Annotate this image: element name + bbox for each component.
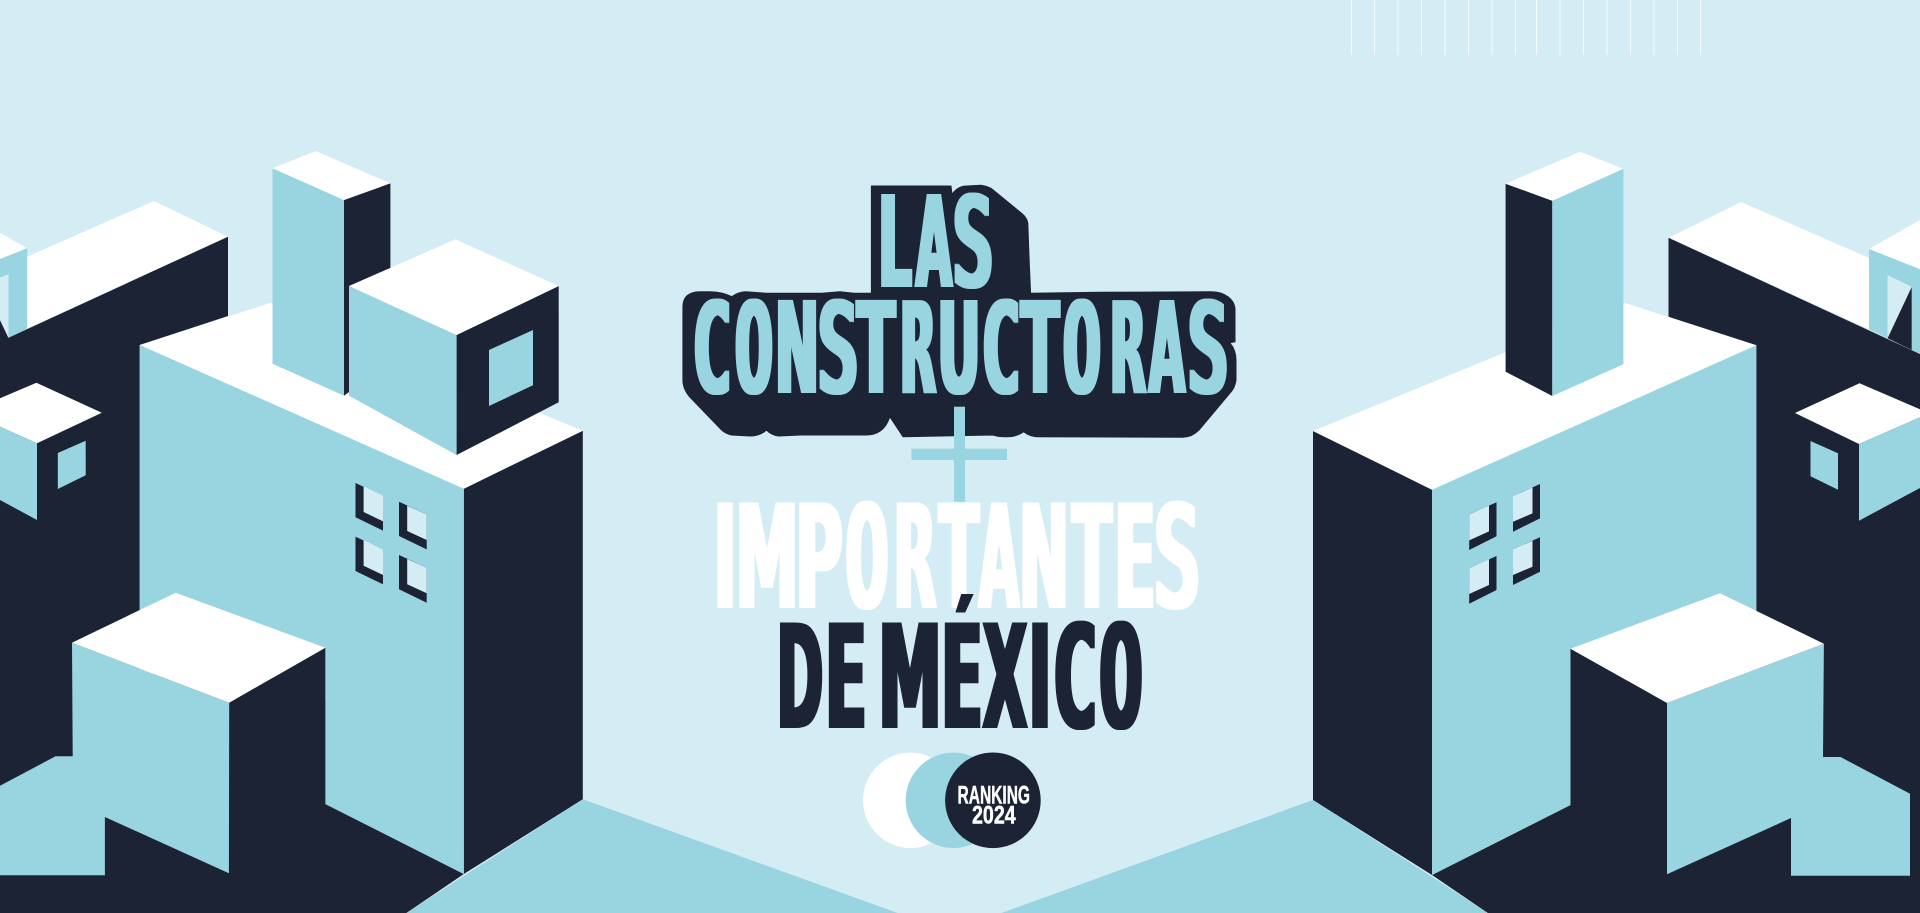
main building dark side and ground — [1313, 431, 1920, 913]
heading line: DE MÉXICO: D — [777, 595, 823, 763]
heading line: IMPORTANTES: M — [735, 475, 798, 643]
front cube — [0, 593, 360, 880]
heading line: DE MÉXICO: C — [1051, 595, 1098, 763]
heading line: IMPORTANTES: S — [1153, 475, 1201, 643]
heading line: CONSTRUCTORAS: U — [938, 276, 981, 424]
chimney tower — [1506, 152, 1623, 396]
heading line: LAS: A — [916, 170, 951, 318]
facade windows — [1469, 484, 1540, 604]
heading line: IMPORTANTES — [714, 470, 1201, 643]
heading line: CONSTRUCTORAS: S — [816, 276, 859, 424]
plus sign — [911, 407, 1007, 502]
heading line: CONSTRUCTORAS: R — [900, 276, 936, 424]
heading line: LAS — [878, 170, 994, 318]
heading line: IMPORTANTES: T — [1072, 475, 1111, 643]
ground plane right — [1002, 800, 1488, 913]
heading line: IMPORTANTES: N — [1019, 475, 1069, 643]
heading line: IMPORTANTES: I — [714, 470, 736, 641]
heading line: IMPORTANTES: A — [979, 475, 1019, 643]
panel: left isometric buildings — [0, 151, 898, 913]
heading line: CONSTRUCTORAS: R — [1110, 276, 1146, 424]
ground plane left — [406, 799, 898, 913]
heading line: IMPORTANTES: R — [894, 475, 937, 643]
back slab roof — [1668, 202, 1869, 329]
heading line: CONSTRUCTORAS: T — [857, 276, 895, 424]
heading line: DE MÉXICO: E — [825, 595, 866, 763]
rooftop cube with window — [349, 239, 559, 455]
heading line: CONSTRUCTORAS: C — [692, 276, 732, 424]
top-left small tower — [0, 233, 27, 338]
front cube — [1570, 593, 1910, 880]
heading line: DE MÉXICO: I — [1029, 590, 1051, 761]
extruded dark plate behind title — [683, 185, 1236, 437]
heading line: IMPORTANTES: E — [1114, 475, 1155, 643]
small side cube — [0, 383, 102, 520]
main building roof — [1313, 303, 1756, 490]
heading line: CONSTRUCTORAS: S — [1187, 276, 1229, 424]
heading line: IMPORTANTES: P — [795, 475, 843, 643]
back slab building roof — [27, 201, 228, 329]
heading line: CONSTRUCTORAS: O — [1062, 276, 1101, 424]
heading line: DE MÉXICO: M — [878, 595, 941, 763]
heading line: CONSTRUCTORAS — [692, 276, 1229, 424]
heading line: IMPORTANTES: O — [844, 475, 889, 643]
main building dark side and ground — [0, 431, 583, 913]
heading line: LAS: S — [952, 170, 994, 318]
ranking badge — [863, 752, 1041, 848]
panel: right isometric buildings — [1002, 152, 1920, 913]
main building blue face — [1432, 345, 1756, 875]
main building blue face — [140, 345, 464, 874]
heading line: CONSTRUCTORAS: O — [734, 276, 773, 424]
heading line: DE MÉXICO: É — [941, 595, 982, 763]
heading line: DE MÉXICO: X — [983, 595, 1027, 763]
heading line: CONSTRUCTORAS: A — [1149, 276, 1185, 424]
heading line: DE MÉXICO: O — [1099, 595, 1143, 763]
chimney tower — [272, 151, 390, 396]
badge label: RANKING: RANKING — [958, 781, 1030, 809]
heading line: CONSTRUCTORAS: N — [775, 276, 818, 424]
main building roof — [140, 303, 583, 489]
small side cube — [1795, 383, 1920, 521]
top-right small tower — [1869, 220, 1920, 353]
back slab dark wall — [1668, 238, 1920, 913]
heading line: IMPORTANTES: T — [940, 475, 979, 643]
heading line: LAS: L — [878, 170, 912, 318]
heading line: DE MÉXICO — [777, 590, 1143, 763]
badge label: 2024: 2024 — [972, 801, 1016, 829]
facade windows — [356, 483, 427, 603]
back slab building dark wall — [0, 237, 228, 913]
heading line: CONSTRUCTORAS: T — [1021, 276, 1059, 424]
heading line: CONSTRUCTORAS: C — [981, 276, 1021, 424]
